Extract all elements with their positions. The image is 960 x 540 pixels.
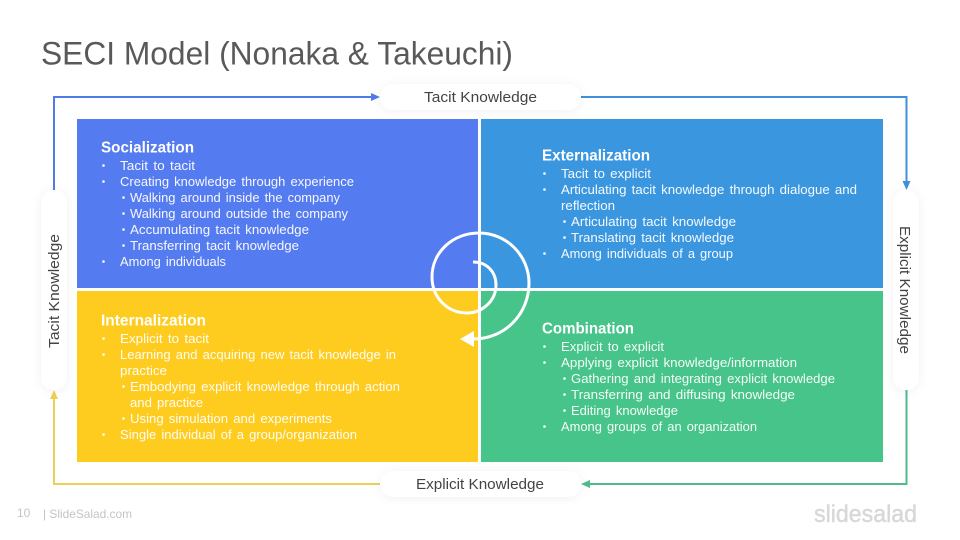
- label: top tacit knowledge: [380, 84, 581, 110]
- list: internalization points: Learning and acquiring new tacit knowledge in: [120, 347, 396, 362]
- heading: internalization: Internalization: [101, 312, 206, 330]
- list: combination points: Gathering and integrating explicit knowledge: [571, 371, 835, 386]
- arrow: bottom-left yellow connector: [50, 390, 380, 484]
- list: externalization points: Translating tacit knowledge: [571, 230, 734, 245]
- list: combination points: Explicit to explicit: [561, 339, 664, 354]
- list: internalization points: Explicit to tacit: [120, 331, 209, 346]
- label: left tacit knowledge: Tacit Knowledge: [47, 234, 63, 348]
- list: socialization points: [102, 158, 354, 269]
- label: top tacit knowledge: Tacit Knowledge: [424, 90, 537, 106]
- list: externalization points: Articulating tacit knowledge: [571, 214, 736, 229]
- icon: spiral arrow: [432, 233, 529, 347]
- list: socialization points: Among individuals: [120, 254, 226, 269]
- logo: slidesalad: slidesalad: [814, 501, 917, 528]
- title: SECI Model (Nonaka & Takeuchi): [41, 36, 513, 72]
- list: internalization points: practice: [120, 363, 167, 378]
- list: socialization points: Creating knowledge through experience: [120, 174, 354, 189]
- panel: combination: [481, 291, 883, 462]
- footer: page number and site: 10: [17, 506, 31, 520]
- list: socialization points: Walking around outside the company: [130, 206, 348, 221]
- list: internalization points: and practice: [130, 395, 203, 410]
- list: socialization points: Accumulating tacit knowledge: [130, 222, 309, 237]
- list: externalization points: Among individuals of a group: [561, 246, 733, 261]
- heading: externalization: Externalization: [542, 148, 650, 164]
- panel: externalization: [481, 119, 883, 288]
- list: combination points: Among groups of an organization: [561, 419, 757, 434]
- label: bottom explicit knowledge: Explicit Knowledge: [416, 477, 544, 493]
- list: internalization points: [102, 331, 400, 442]
- list: externalization points: [543, 166, 857, 261]
- list: internalization points: Using simulation and experiments: [130, 411, 332, 426]
- label: left tacit knowledge: [41, 190, 67, 390]
- arrow: bottom-right green connector: [581, 390, 906, 488]
- list: externalization points: Tacit to explicit: [561, 166, 651, 181]
- list: externalization points: reflection: [561, 198, 615, 213]
- list: combination points: Editing knowledge: [571, 403, 678, 418]
- list: internalization points: Embodying explicit knowledge through action: [130, 379, 400, 394]
- panel: socialization: [77, 119, 478, 288]
- list: socialization points: Walking around inside the company: [130, 190, 340, 205]
- heading: socialization: Socialization: [101, 140, 194, 156]
- label: right explicit knowledge: Explicit Knowledge: [896, 226, 912, 354]
- panel: internalization: [77, 291, 478, 462]
- list: externalization points: Articulating tacit knowledge through dialogue and: [561, 182, 857, 197]
- list: internalization points: Single individual of a group/organization: [120, 427, 357, 442]
- footer: page number and site: | SlideSalad.com: [43, 507, 132, 521]
- heading: combination: Combination: [542, 320, 634, 338]
- arrow: top-left blue connector: [54, 93, 380, 190]
- list: combination points: [543, 339, 835, 434]
- list: socialization points: Transferring tacit knowledge: [130, 238, 299, 253]
- list: combination points: Applying explicit knowledge/information: [561, 355, 797, 370]
- list: combination points: Transferring and diffusing knowledge: [571, 387, 795, 402]
- label: right explicit knowledge: [893, 190, 919, 390]
- label: bottom explicit knowledge: [380, 471, 581, 497]
- list: socialization points: Tacit to tacit: [120, 158, 195, 173]
- arrow: top-right teal connector: [581, 97, 910, 190]
